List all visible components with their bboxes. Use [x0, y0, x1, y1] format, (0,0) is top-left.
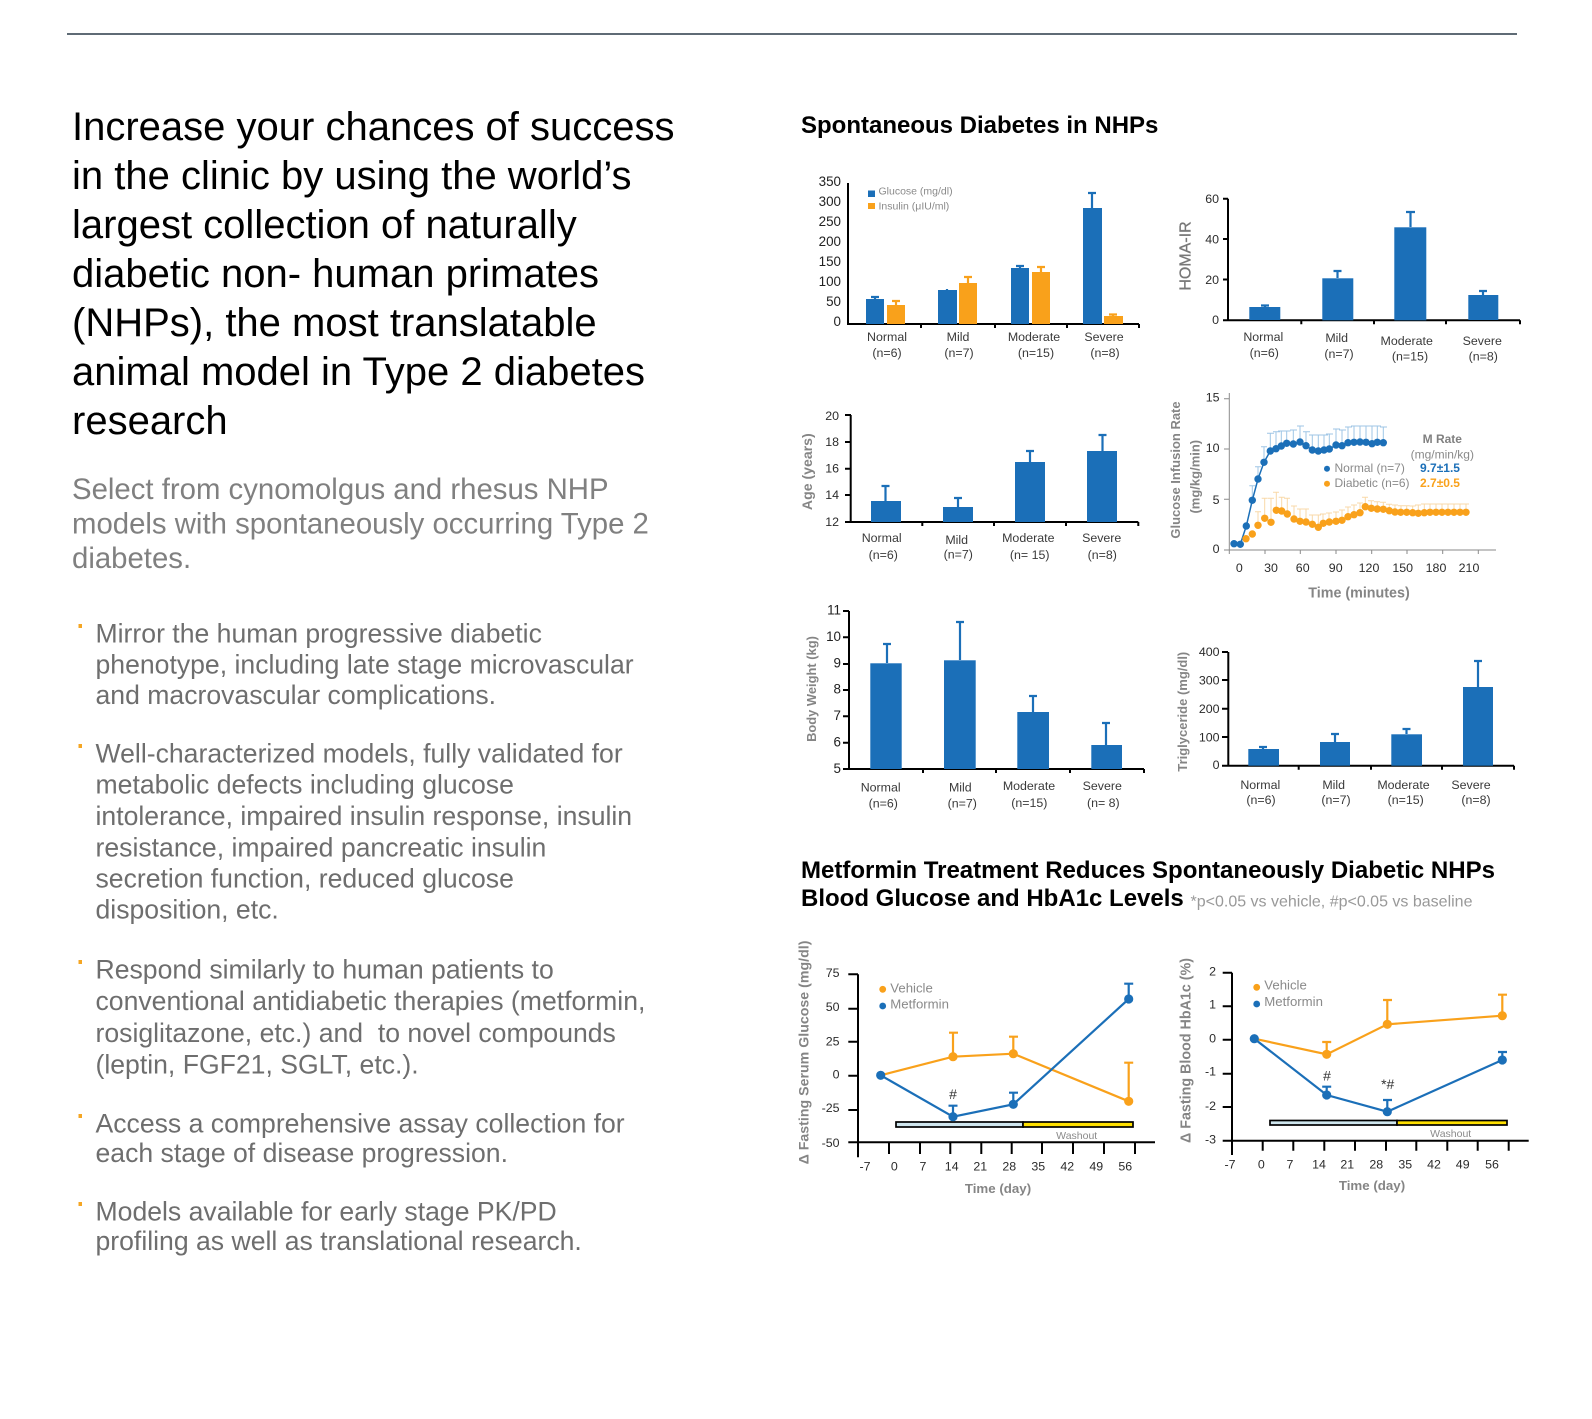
x axis labels: 35: [1031, 1160, 1045, 1174]
bullet: similar therapy response: (leptin, FGF21, SGLT, etc.).: [96, 1050, 419, 1080]
y axis labels: 60: [1205, 192, 1219, 206]
category labels: Mild: [1325, 331, 1348, 345]
bars: [870, 622, 1122, 769]
y axis labels: [819, 174, 841, 329]
x axis labels: 90: [1329, 561, 1343, 575]
y axis labels: -3: [1205, 1132, 1216, 1146]
category labels: Moderate: [1008, 330, 1060, 344]
normal series: [1230, 438, 1387, 548]
x axis labels: 35: [1398, 1158, 1412, 1172]
x axis labels: [859, 1160, 1132, 1174]
bullet: well-characterized models: Well-characterized models, fully validated for: [96, 738, 623, 768]
category labels: (n=6): [872, 346, 902, 360]
bullet: progressive phenotype: phenotype, including late stage microvascular: [96, 650, 634, 680]
y axis title: Body Weight (kg): [804, 636, 819, 742]
y axis labels: 0: [834, 314, 841, 329]
treatment and washout bar: [896, 1122, 1133, 1142]
legend: Insulin (μIU/ml): [878, 200, 949, 212]
category labels: Mild: [947, 330, 969, 344]
y axis labels: 12: [825, 515, 839, 529]
bullet: well-characterized models: disposition, etc.: [96, 895, 279, 925]
category labels: (n= 15): [1010, 548, 1050, 562]
section title: metformin treatment: Metformin Treatment Reduces Spontaneously Diabetic NHPs: [801, 857, 1495, 884]
axes: [843, 611, 1144, 773]
insulin bars: [887, 267, 1123, 324]
headline: research: [72, 399, 228, 443]
category labels: [867, 330, 1124, 360]
category labels: (n=15): [1388, 793, 1424, 807]
x axis labels: 30: [1264, 561, 1278, 575]
y axis labels: 10: [826, 629, 841, 644]
chart: fasting blood HbA1c: [1178, 958, 1529, 1193]
bullet: PK/PD profiling: profiling as well as translational research.: [96, 1226, 582, 1256]
chart: fasting serum glucose: [796, 940, 1155, 1196]
y axis labels: 5: [834, 761, 841, 776]
y axis labels: 350: [819, 174, 841, 189]
y axis labels: 9: [834, 656, 841, 670]
category labels: (n=7): [944, 548, 973, 562]
y axis labels: 300: [1199, 674, 1220, 688]
category labels: (n= 8): [1087, 796, 1120, 810]
category labels: (n=8): [1090, 346, 1120, 360]
category labels: (n=8): [1469, 350, 1498, 364]
legend with M rate values: 9.7±1.5: [1420, 461, 1460, 475]
diabetic series: [1242, 503, 1470, 542]
headline: (NHPs), the most translatable: [72, 301, 597, 345]
category labels: [862, 531, 1121, 562]
y axis labels: 250: [819, 214, 841, 229]
y axis labels: 20: [1205, 273, 1219, 287]
x axis title: Time (day): [1339, 1178, 1405, 1193]
category labels: (n=6): [1250, 346, 1279, 360]
bullet: assay collection: Access a comprehensive assay collection for: [96, 1108, 625, 1138]
x axis labels: 0: [1236, 561, 1243, 575]
legend: [1253, 978, 1323, 1009]
y axis labels: 10: [1206, 441, 1220, 455]
bars: [1249, 212, 1498, 320]
normal error bars: [1249, 426, 1387, 500]
y axis labels: [1206, 390, 1220, 556]
x axis labels: [1224, 1158, 1499, 1172]
y axis labels: 16: [825, 462, 839, 476]
y axis title: (mg/kg/min): [1188, 440, 1202, 514]
category labels: (n=6): [869, 548, 898, 562]
category labels: Mild: [1322, 778, 1345, 792]
category labels: [1243, 330, 1502, 364]
legend with M rate values: 2.7±0.5: [1420, 476, 1460, 490]
x axis labels: 14: [1312, 1158, 1326, 1172]
bullet: PK/PD profiling: Models available for early stage PK/PD: [96, 1196, 557, 1226]
legend: Metformin: [1264, 994, 1323, 1009]
bullet: progressive phenotype: Mirror the human progressive diabetic: [96, 618, 542, 648]
category labels: Severe: [1083, 779, 1122, 793]
vehicle series: [881, 1033, 1133, 1106]
headline: in the clinic by using the world’s: [72, 154, 632, 198]
legend: Vehicle: [890, 980, 933, 996]
section title: spontaneous diabetes: Spontaneous Diabetes in NHPs: [801, 112, 1158, 139]
x axis title: Time (minutes): [1308, 586, 1410, 602]
y axis title: [1168, 401, 1202, 539]
y axis labels: 14: [825, 488, 839, 502]
axes: [848, 183, 1139, 328]
chart: triglyceride: [1175, 645, 1514, 807]
significance mark: #: [949, 1086, 957, 1102]
subheading: Select from cynomolgus and rhesus NHP: [72, 473, 608, 506]
y axis labels: 200: [1199, 702, 1220, 716]
x axis labels: 120: [1359, 561, 1379, 575]
legend: Metformin: [890, 996, 949, 1012]
legend: Glucose (mg/dl): [878, 186, 953, 198]
y axis labels: 40: [1205, 232, 1219, 246]
x axis labels: 49: [1089, 1160, 1103, 1174]
x axis labels: 7: [920, 1160, 927, 1174]
bars: [1248, 661, 1493, 766]
category labels: Severe: [1084, 330, 1124, 344]
x axis labels: 60: [1296, 561, 1310, 575]
category labels: Moderate: [1002, 531, 1055, 545]
y axis labels: [822, 966, 840, 1150]
y axis title: Δ Fasting Blood HbA1c (%): [1178, 958, 1194, 1143]
y axis title: Triglyceride (mg/dl): [1175, 652, 1190, 772]
legend with M rate values: M Rate: [1423, 432, 1462, 446]
x axis labels: 14: [945, 1160, 959, 1174]
category labels: Moderate: [1003, 779, 1055, 793]
section title: metformin treatment: Blood Glucose and HbA1c Levels: [801, 885, 1184, 912]
x axis labels: 28: [1369, 1158, 1383, 1172]
category labels: Mild: [949, 780, 972, 794]
category labels: [861, 779, 1122, 810]
y axis labels: 0: [1212, 313, 1219, 327]
category labels: (n=6): [1246, 793, 1276, 807]
x axis labels: 7: [1287, 1158, 1294, 1172]
x axis labels: 42: [1427, 1158, 1441, 1172]
category labels: [1240, 778, 1491, 807]
y axis labels: [1205, 192, 1219, 327]
metformin series: [876, 984, 1133, 1121]
y axis title: Δ Fasting Serum Glucose (mg/dl): [796, 940, 812, 1164]
y axis labels: 5: [1213, 493, 1220, 507]
category labels: Normal: [861, 780, 901, 794]
category labels: Normal: [1240, 778, 1280, 792]
y axis labels: 0: [833, 1068, 840, 1082]
axes: [848, 974, 1155, 1157]
bullet: well-characterized models: intolerance, impaired insulin response, insulin: [96, 801, 632, 831]
bullet: PK/PD profiling: [78, 1196, 582, 1256]
y axis labels: 7: [834, 708, 841, 723]
headline: animal model in Type 2 diabetes: [72, 350, 645, 394]
x axis labels: 28: [1002, 1160, 1016, 1174]
y axis labels: 1: [1209, 998, 1216, 1012]
x axis labels: 210: [1459, 561, 1479, 575]
y axis title: Age (years): [799, 433, 815, 510]
x axis labels: 56: [1118, 1160, 1132, 1174]
y axis labels: 100: [1199, 730, 1220, 744]
category labels: Mild: [945, 533, 968, 547]
axes: [845, 415, 1138, 526]
y axis labels: 6: [834, 734, 841, 750]
legend with M rate values: (mg/min/kg): [1411, 448, 1474, 462]
bullet: progressive phenotype: and macrovascular complications.: [96, 680, 496, 710]
category labels: (n=7): [1321, 793, 1351, 807]
category labels: (n=6): [869, 796, 898, 810]
y axis labels: [1199, 645, 1220, 772]
y axis labels: 150: [819, 254, 841, 269]
x axis labels: [1236, 561, 1479, 575]
diabetic error bars: [1255, 492, 1469, 527]
bullet: similar therapy response: Respond similarly to human patients to: [96, 955, 554, 985]
section title: metformin treatment: *p<0.05 vs vehicle, #p<0.05 vs baseline: [1190, 894, 1473, 910]
x axis labels: 56: [1485, 1158, 1499, 1172]
y axis labels: 11: [827, 602, 841, 618]
y axis labels: -2: [1205, 1099, 1216, 1113]
category labels: Moderate: [1377, 778, 1430, 792]
x axis title: Time (day): [965, 1181, 1031, 1196]
y axis labels: [826, 602, 841, 776]
significance marks: *#: [1381, 1076, 1395, 1092]
x axis labels: 0: [891, 1160, 898, 1174]
y axis labels: 0: [1209, 1032, 1216, 1046]
category labels: Normal: [867, 330, 907, 344]
subheading: models with spontaneously occurring Type 2: [72, 508, 649, 540]
y axis labels: 0: [1213, 758, 1220, 772]
x axis labels: -7: [859, 1160, 871, 1174]
y axis title: HOMA-IR: [1178, 221, 1194, 291]
legend: Vehicle: [1264, 978, 1307, 992]
y axis labels: 0: [1213, 542, 1220, 556]
y axis labels: 2: [1209, 964, 1216, 978]
chart: body weight: [804, 602, 1144, 810]
bullet: well-characterized models: [78, 738, 632, 925]
treatment and washout bar: [1270, 1120, 1507, 1140]
treatment and washout bar: Washout: [1430, 1128, 1471, 1140]
y axis labels: 300: [819, 194, 841, 209]
headline: largest collection of naturally: [72, 203, 577, 247]
bullet: well-characterized models: secretion function, reduced glucose: [96, 864, 514, 894]
x axis labels: 180: [1426, 561, 1446, 575]
headline: diabetic non- human primates: [72, 252, 599, 296]
chart: glucose and insulin: [819, 174, 1139, 360]
y axis labels: [825, 409, 839, 529]
glucose bars: [866, 193, 1102, 324]
bullet: assay collection: each stage of disease progression.: [96, 1138, 508, 1168]
legend: [868, 186, 953, 212]
y axis labels: -25: [822, 1101, 840, 1115]
y axis labels: 25: [826, 1034, 840, 1048]
chart: glucose infusion rate: [1168, 390, 1496, 602]
legend with M rate values: Diabetic (n=6): [1334, 476, 1410, 490]
y axis labels: 200: [819, 234, 841, 249]
category labels: Normal: [862, 531, 902, 545]
legend: [879, 980, 949, 1012]
category labels: Normal: [1243, 330, 1283, 344]
chart: age: [799, 409, 1138, 562]
bars: [871, 435, 1117, 522]
category labels: (n=7): [948, 796, 977, 810]
bullet: well-characterized models: metabolic defects including glucose: [96, 770, 514, 800]
treatment and washout bar: Washout: [1056, 1130, 1097, 1142]
x axis labels: 21: [1340, 1158, 1354, 1172]
category labels: (n=7): [944, 346, 974, 360]
category labels: (n=8): [1088, 548, 1117, 562]
y axis labels: [1205, 964, 1216, 1146]
x axis labels: 0: [1258, 1158, 1265, 1172]
x axis labels: 42: [1060, 1160, 1074, 1174]
y axis labels: 15: [1206, 390, 1220, 404]
y axis labels: 75: [826, 966, 840, 980]
bullet: similar therapy response: rosiglitazone, etc.) and to novel compounds: [96, 1018, 616, 1048]
y axis labels: 50: [826, 294, 841, 309]
vehicle series: [1254, 995, 1507, 1059]
y axis labels: 18: [825, 435, 839, 449]
category labels: (n=8): [1461, 793, 1491, 807]
y axis labels: 50: [826, 1000, 840, 1014]
category labels: (n=15): [1011, 796, 1047, 810]
category labels: (n=7): [1324, 347, 1354, 361]
y axis title: Glucose Infusion Rate: [1168, 401, 1183, 539]
significance marks: [1323, 1068, 1395, 1092]
category labels: Severe: [1463, 334, 1502, 348]
x axis labels: 21: [973, 1160, 987, 1174]
category labels: (n=15): [1392, 350, 1428, 364]
bullet: assay collection: [78, 1108, 625, 1168]
bullet: well-characterized models: resistance, impaired pancreatic insulin: [96, 832, 546, 862]
subheading: diabetes.: [72, 542, 191, 575]
bullet: progressive phenotype: [78, 618, 634, 710]
category labels: Moderate: [1381, 334, 1433, 348]
bullet list: [78, 618, 645, 1256]
x axis labels: -7: [1224, 1158, 1236, 1172]
headline: Increase your chances of success: [72, 105, 675, 149]
category labels: Severe: [1451, 778, 1491, 792]
y axis labels: 8: [834, 682, 841, 696]
y axis labels: -50: [822, 1136, 840, 1150]
axes: [1223, 973, 1529, 1155]
axes: [1223, 199, 1520, 324]
axes: [1224, 393, 1496, 554]
legend with M rate values: Normal (n=7): [1334, 461, 1405, 475]
chart: HOMA-IR: [1178, 192, 1520, 364]
y axis labels: 400: [1199, 645, 1220, 659]
x axis labels: 49: [1456, 1158, 1470, 1172]
bullet: similar therapy response: [78, 955, 645, 1080]
axes: [1222, 652, 1514, 770]
metformin series: [1250, 1034, 1507, 1116]
bullet: similar therapy response: conventional antidiabetic therapies (metformin,: [96, 986, 645, 1016]
y axis labels: 20: [825, 409, 839, 423]
legend with M rate values: [1324, 432, 1474, 490]
y axis labels: -1: [1205, 1064, 1216, 1078]
section title: metformin treatment: [801, 857, 1495, 912]
significance marks: #: [1323, 1068, 1331, 1084]
category labels: Severe: [1082, 531, 1121, 545]
x axis labels: 150: [1392, 561, 1413, 575]
category labels: (n=15): [1018, 346, 1054, 360]
y axis labels: 100: [819, 274, 841, 289]
